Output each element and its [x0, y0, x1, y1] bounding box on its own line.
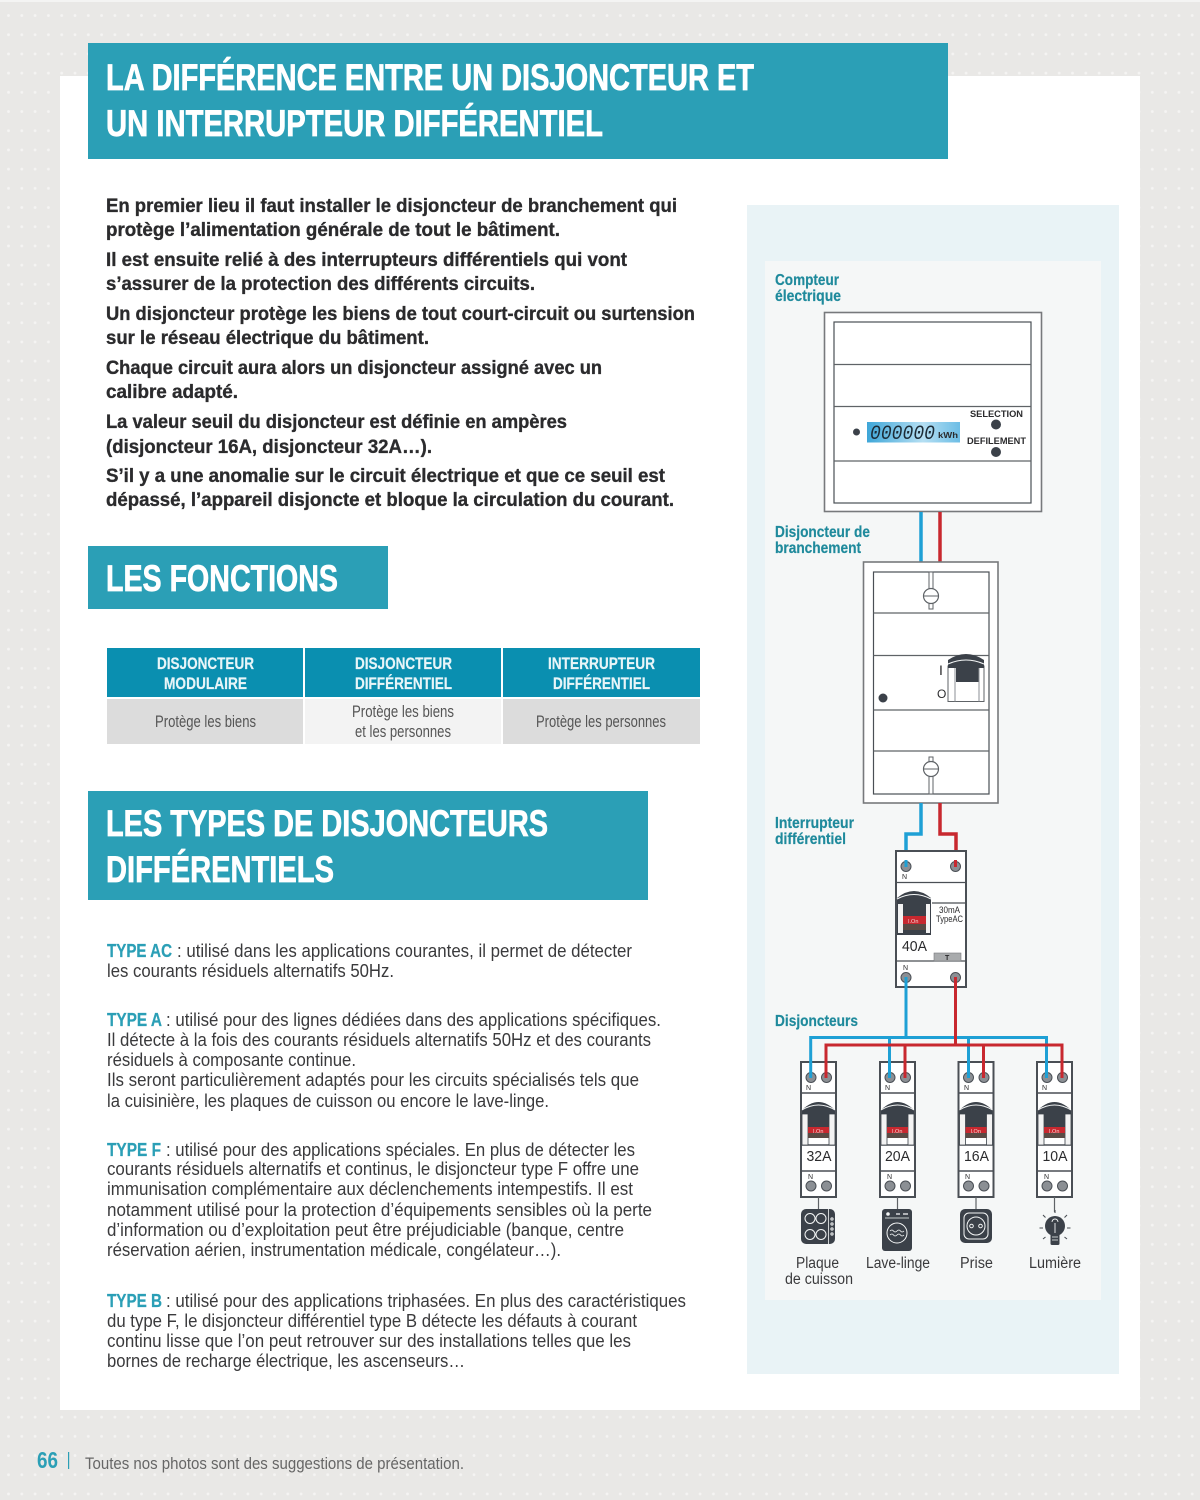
footer: page number and note [37, 1447, 464, 1473]
table: fonctions: DIFFÉRENTIEL [355, 674, 452, 693]
label: compteur: Compteur [775, 272, 839, 289]
text block: type A: Il détecte à la fois des courants résiduels alternatifs 50Hz et des courants [107, 1029, 651, 1050]
table: fonctions: et les personnes [355, 723, 451, 741]
wires: distribution bus [811, 977, 1062, 1078]
text block: type A: résiduels à composante continue. [107, 1049, 356, 1070]
wires: main breaker to residual current switch [906, 803, 956, 866]
label: interrupteur differentiel: différentiel [775, 831, 846, 848]
intro text block: sur le réseau électrique du bâtiment. [106, 327, 429, 349]
label: interrupteur differentiel [775, 815, 854, 848]
meter [824, 312, 1042, 512]
breakers row: N [885, 1085, 890, 1092]
appliance captions: de cuisson [785, 1271, 853, 1288]
meter: 000000 [870, 423, 935, 446]
text block: type B [107, 1290, 686, 1371]
breakers row: N [965, 1174, 970, 1181]
text block: type F: TYPE F [107, 1139, 161, 1160]
residual current switch: T [945, 955, 950, 962]
label: disjoncteur de branchement: branchement [775, 540, 862, 557]
title banner [88, 43, 948, 159]
breakers row [801, 1062, 1072, 1197]
text block: type B: du type F, le disjoncteur différentiel type B détecte les défauts à courant [107, 1310, 637, 1331]
heading: les types de disjoncteurs [88, 791, 648, 900]
intro text block: Il est ensuite relié à des interrupteurs différentiels qui vont [106, 249, 627, 271]
text block: type AC: les courants résiduels alternatifs 50Hz. [107, 960, 394, 981]
intro text block: protège l’alimentation générale de tout le bâtiment. [106, 219, 560, 241]
wires: meter to main breaker [921, 512, 940, 562]
table: fonctions: MODULAIRE [164, 675, 247, 693]
label: compteur: électrique [775, 288, 841, 305]
text block: type A: : utilisé pour des lignes dédiées dans des applications spécifiques. [166, 1009, 661, 1030]
breakers row: 20A [885, 1149, 910, 1165]
heading: les types de disjoncteurs: LES TYPES DE DISJONCTEURS [106, 803, 548, 844]
breakers row: N [806, 1085, 811, 1092]
intro text block: En premier lieu il faut installer le disjoncteur de branchement qui [106, 195, 677, 217]
panel: schema [747, 205, 1119, 1374]
appliance captions: Plaque [796, 1255, 839, 1272]
text block: type B: : utilisé pour des applications triphasées. En plus des caractéristiques [166, 1290, 686, 1311]
residual current switch: 40A [902, 938, 927, 955]
breakers row: N [964, 1085, 969, 1092]
text block: type A: Ils seront particulièrement adaptés pour les circuits spécialisés tels que [107, 1069, 639, 1090]
heading: les types de disjoncteurs: DIFFÉRENTIELS [106, 849, 334, 890]
table: fonctions: Protège les personnes [536, 713, 666, 731]
table: fonctions: INTERRUPTEUR [548, 655, 655, 673]
main breaker: I [939, 662, 943, 678]
breakers row: N [1044, 1174, 1049, 1181]
appliance captions: Lumière [1029, 1255, 1081, 1272]
text block: type AC: : utilisé dans les applications courantes, il permet de détecter [177, 940, 632, 961]
footer: page number and note: Toutes nos photos sont des suggestions de présentation. [85, 1454, 464, 1473]
label: compteur [775, 272, 841, 305]
residual current switch: I.On [908, 919, 918, 925]
breakers row: 10A [1042, 1149, 1068, 1165]
heading: les fonctions [88, 546, 388, 609]
text block: type A [107, 1009, 661, 1111]
appliance captions [785, 1255, 1081, 1288]
text block: type F: d’information ou d’exploitation peut être préjudiciable (banque, centre [107, 1219, 624, 1240]
breakers row: 16A [964, 1149, 989, 1165]
breakers row: 32A [806, 1149, 832, 1165]
table: fonctions [107, 648, 700, 744]
intro text block: (disjoncteur 16A, disjoncteur 32A…). [106, 436, 432, 458]
table: fonctions: DISJONCTEUR [355, 655, 452, 673]
text block: type B: continu lisse que l’on peut retrouver sur des installations telles que les [107, 1330, 631, 1351]
icon: washing machine [882, 1209, 912, 1251]
breakers row: I.On [1049, 1129, 1059, 1135]
text block: type AC: TYPE AC [107, 940, 172, 961]
stems to appliances [818, 1197, 1054, 1212]
text block: type AC [107, 940, 632, 981]
table: fonctions: Protège les biens [352, 703, 454, 721]
residual current switch: N [903, 965, 908, 972]
main breaker: O [937, 687, 946, 701]
title banner: UN INTERRUPTEUR DIFFÉRENTIEL [106, 103, 603, 144]
heading: les fonctions: LES FONCTIONS [106, 558, 338, 599]
text block: type F [107, 1139, 652, 1260]
breakers row: N [1042, 1085, 1047, 1092]
meter: DEFILEMENT [967, 436, 1026, 447]
text block: type F: notamment utilisé pour la protection d’équipements sensibles où la perte [107, 1199, 652, 1220]
appliance captions: Lave-linge [866, 1255, 930, 1272]
residual current switch: N [902, 874, 907, 881]
residual current switch: 30mA [939, 905, 960, 915]
intro text block: Chaque circuit aura alors un disjoncteur assigné avec un [106, 357, 602, 379]
intro text block: S’il y a une anomalie sur le circuit électrique et que ce seuil est [106, 465, 665, 487]
icon: socket [960, 1209, 992, 1243]
icon: cooktop [801, 1209, 835, 1244]
icon: light bulb [1040, 1210, 1070, 1245]
intro text block: calibre adapté. [106, 381, 238, 403]
text block: type A: la cuisinière, les plaques de cuisson ou encore le lave-linge. [107, 1090, 549, 1111]
breakers row: I.On [813, 1129, 823, 1135]
breakers row: I.On [892, 1129, 902, 1135]
table: fonctions: Protège les biens [155, 713, 256, 731]
label: disjoncteur de branchement: Disjoncteur de [775, 524, 870, 541]
text block: type B: bornes de recharge électrique, les ascenseurs… [107, 1350, 465, 1371]
breakers row: N [887, 1174, 892, 1181]
breakers row: I.On [970, 1129, 981, 1135]
meter: kWh [938, 430, 958, 440]
label: disjoncteur de branchement [775, 524, 870, 557]
text block: type F: immunisation complémentaire aux déclenchements intempestifs. Il est [107, 1178, 633, 1199]
label: interrupteur differentiel: Interrupteur [775, 815, 854, 832]
footer: page number and note: 66 [37, 1447, 58, 1473]
intro text block: s’assurer de la protection des différents circuits. [106, 273, 535, 295]
table: fonctions: DIFFÉRENTIEL [553, 674, 650, 693]
table: fonctions: DISJONCTEUR [157, 655, 254, 673]
residual current switch: TypeAC [936, 914, 963, 924]
intro text block [106, 195, 695, 511]
intro text block: La valeur seuil du disjoncteur est définie en ampères [106, 411, 567, 433]
residual current switch [896, 851, 966, 987]
appliance captions: Prise [960, 1255, 993, 1272]
text block: type A: TYPE A [107, 1009, 162, 1030]
intro text block: Un disjoncteur protège les biens de tout court-circuit ou surtension [106, 303, 695, 325]
text block: type F: réservation aérien, instrumentation médicale, congélateur…). [107, 1239, 561, 1260]
main breaker [864, 562, 998, 803]
breakers row: N [808, 1174, 813, 1181]
text block: type F: courants résiduels alternatifs et continus, le disjoncteur type F offre une [107, 1158, 639, 1179]
intro text block: dépassé, l’appareil disjoncte et bloque la circulation du courant. [106, 489, 674, 511]
text block: type B: TYPE B [107, 1290, 162, 1311]
label: disjoncteurs: Disjoncteurs [775, 1013, 858, 1030]
meter: SELECTION [970, 409, 1023, 420]
text block: type F: : utilisé pour des applications spéciales. En plus de détecter les [166, 1139, 635, 1160]
title banner: LA DIFFÉRENCE ENTRE UN DISJONCTEUR ET [106, 57, 754, 98]
